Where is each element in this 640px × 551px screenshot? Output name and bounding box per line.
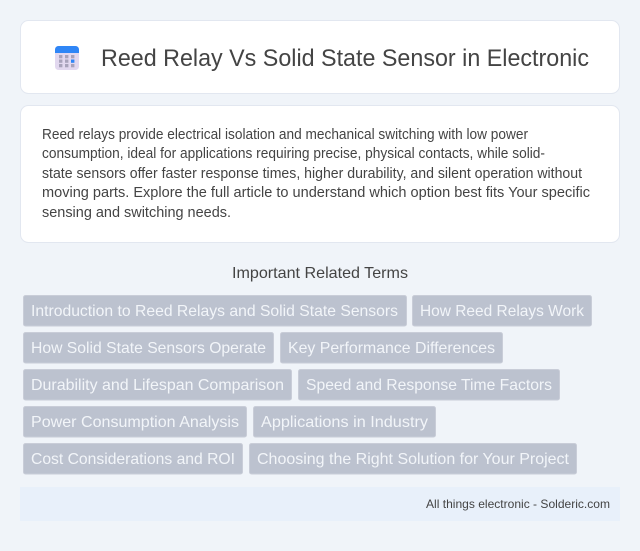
tag: Applications in Industry	[261, 414, 428, 431]
tag	[412, 296, 592, 326]
heading: important related terms: Important Related Terms	[232, 265, 408, 282]
text block: description: sensing and switching needs.	[42, 205, 231, 221]
tag: Introduction to Reed Relays and Solid State Sensors	[31, 303, 398, 320]
tag	[250, 444, 576, 474]
panel: description	[20, 106, 620, 242]
tag: Durability and Lifespan Comparison	[31, 377, 284, 394]
tag	[298, 370, 560, 400]
tag: How Solid State Sensors Operate	[31, 340, 266, 357]
tag	[24, 444, 242, 474]
tag: Cost Considerations and ROI	[31, 451, 235, 468]
icon: calendar	[55, 46, 79, 70]
text block: description: state sensors offer faster response times, higher durability, and silent operation without	[42, 166, 582, 182]
tag: Speed and Response Time Factors	[306, 377, 552, 394]
tag: Power Consumption Analysis	[31, 414, 239, 431]
tag: How Reed Relays Work	[420, 303, 585, 320]
tag	[24, 370, 292, 400]
text block: description: consumption, ideal for applications requiring precise, physical contacts, while solid-	[42, 146, 545, 162]
tag	[280, 332, 502, 363]
tag	[24, 296, 406, 326]
footer	[20, 487, 620, 521]
text block: description	[42, 127, 590, 221]
tag	[254, 406, 436, 437]
tag	[24, 332, 274, 363]
footer: All things electronic - Solderic.com	[426, 497, 610, 511]
text block: description: Reed relays provide electrical isolation and mechanical switching with low power	[42, 127, 528, 143]
tag list	[24, 296, 592, 474]
tag	[24, 406, 246, 437]
tag: Key Performance Differences	[288, 340, 495, 357]
title: Reed Relay Vs Solid State Sensor in Electronic	[101, 45, 589, 72]
tag: Choosing the Right Solution for Your Project	[257, 451, 570, 468]
panel: title header	[20, 20, 620, 94]
text block: description: moving parts. Explore the full article to understand which option best fits Your specific	[42, 185, 590, 201]
